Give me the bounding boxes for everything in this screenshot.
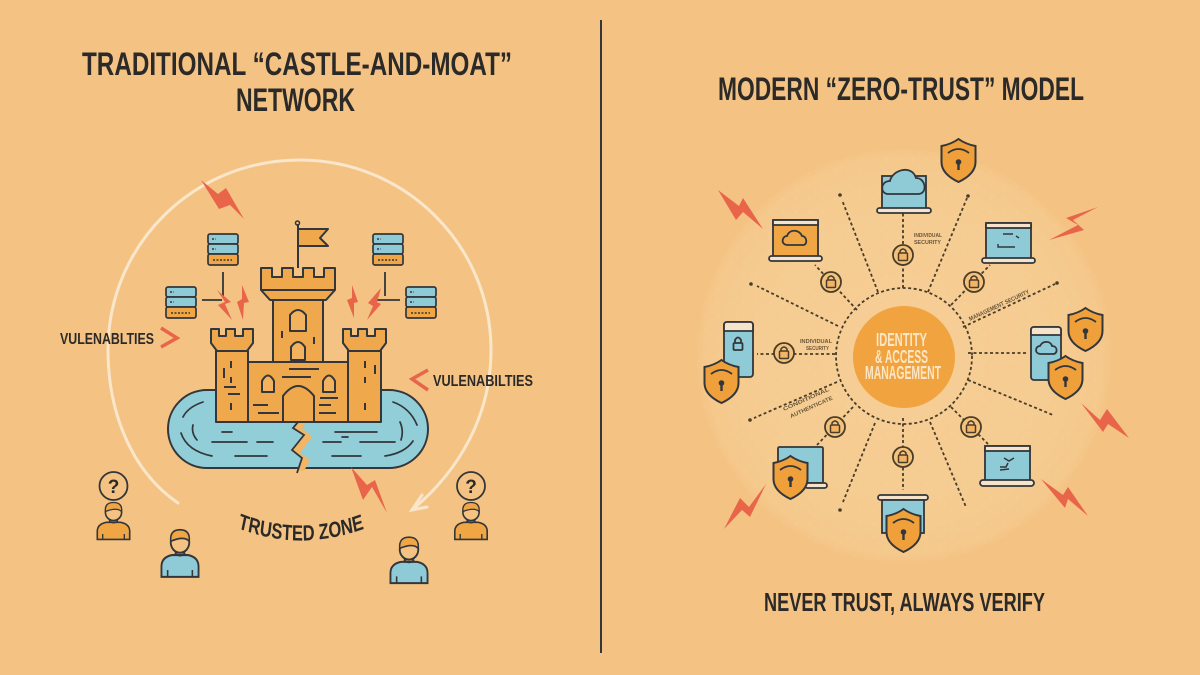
micro labels: AUTHENTICATE <box>789 395 834 420</box>
server: right <box>406 287 436 318</box>
title: castle-and-moat <box>82 46 512 118</box>
micro labels: INDIVIDUAL <box>914 233 943 239</box>
gate wall <box>248 362 348 422</box>
micro labels: SECURITY <box>806 346 829 352</box>
vulnerabilities label: left: VULENABLTIES <box>60 331 154 348</box>
device: blue laptop upper right <box>982 223 1035 263</box>
right tower <box>343 329 386 422</box>
hub: identity and access management <box>853 306 955 408</box>
hub: identity and access management: MANAGEMENT <box>865 363 941 383</box>
server: top right <box>373 234 403 265</box>
user: lower right <box>390 537 428 583</box>
slogan: NEVER TRUST, ALWAYS VERIFY <box>764 587 1045 617</box>
hub: identity and access management: & ACCESS <box>875 347 928 367</box>
device: laptop with shield bottom <box>878 495 928 552</box>
locks on spokes <box>774 245 984 467</box>
server: top left <box>208 234 238 265</box>
micro labels: CONDITIONAL <box>782 387 831 413</box>
server: left <box>166 287 196 318</box>
device: orange laptop <box>769 220 822 261</box>
device: laptop with shield lower left <box>774 447 827 499</box>
flag <box>296 221 328 268</box>
micro labels: MANAGEMENT SECURITY <box>968 289 1031 323</box>
user with question: left <box>97 472 130 539</box>
user with question: right: ? <box>465 477 477 498</box>
vulnerabilities label: right <box>412 370 533 390</box>
micro labels: INDIVIDUAL <box>800 339 833 345</box>
hub: identity and access management: IDENTITY <box>876 330 927 350</box>
castle <box>211 221 386 422</box>
spokes and ring <box>754 198 1055 507</box>
shield: top <box>942 139 976 182</box>
title: castle-and-moat: NETWORK <box>236 82 355 118</box>
central tower <box>261 268 335 364</box>
device: phone right with shields <box>1031 308 1102 399</box>
device: cloud laptop top <box>877 170 931 213</box>
arc arrow: trusted perimeter <box>108 160 491 510</box>
zero-trust disc <box>697 149 1111 563</box>
user: lower left <box>161 530 199 577</box>
title: castle-and-moat: TRADITIONAL “CASTLE-AND-MOAT” <box>82 46 512 82</box>
user with question: left: ? <box>108 477 119 498</box>
moat <box>168 390 428 468</box>
attack bolts: zero trust <box>718 190 1129 529</box>
micro labels <box>782 233 1031 420</box>
spoke end dots <box>748 193 1059 512</box>
attack bolts: castle <box>201 180 387 513</box>
trusted zone label: TRUSTED ZONE <box>240 514 364 541</box>
server connectors <box>202 272 400 300</box>
user with question: right <box>455 472 487 539</box>
center divider <box>600 20 602 653</box>
device: laptop lower right <box>980 446 1034 486</box>
micro labels: SECURITY <box>914 240 941 246</box>
moat crack <box>292 421 312 473</box>
device: phone left with shield <box>704 322 753 403</box>
left tower <box>211 329 253 422</box>
vulnerabilities label: right: VULENABILTIES <box>433 373 533 390</box>
